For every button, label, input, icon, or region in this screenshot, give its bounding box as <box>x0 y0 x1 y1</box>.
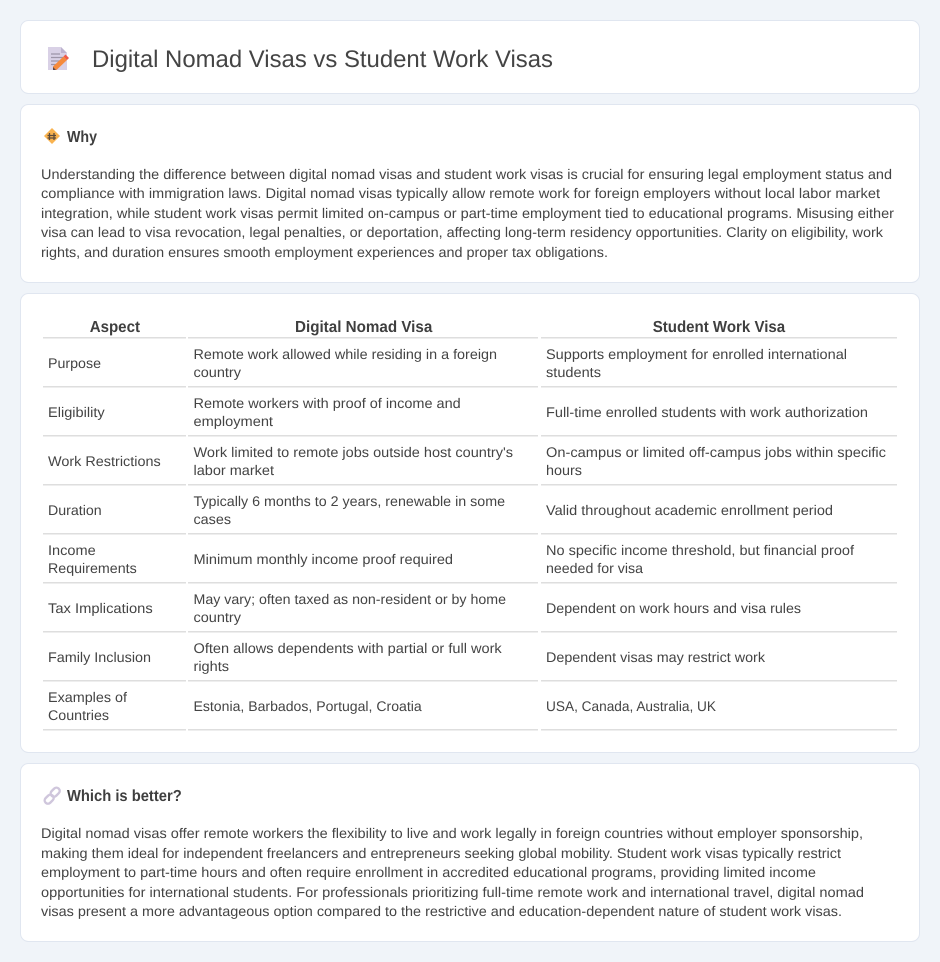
table row: tax implications: Tax Implications <box>48 600 153 616</box>
text block: which is better paragraph: employment to part-time hours and often require enrollment in accredited educational programs, providing limited income <box>41 864 816 880</box>
text block: why paragraph: Understanding the difference between digital nomad visas and student work visas is crucial for ensuring legal employment status and <box>41 166 892 182</box>
table row: duration: Duration <box>48 502 102 518</box>
table row: duration: Typically 6 months to 2 years, renewable in some <box>194 493 505 509</box>
icon: chain link <box>43 786 61 805</box>
table row: income requirements: Minimum monthly income proof required <box>194 551 453 567</box>
table row: tax implications <box>43 591 897 632</box>
table row: income requirements: needed for visa <box>546 560 643 576</box>
icon: document with pencil <box>48 47 69 70</box>
table row: family inclusion <box>43 640 897 682</box>
table row: eligibility: Eligibility <box>48 404 105 420</box>
table row: family inclusion: Family Inclusion <box>48 649 151 665</box>
table row: tax implications: Dependent on work hours and visa rules <box>546 600 801 616</box>
table header row: Aspect <box>90 319 141 336</box>
text block: why paragraph: rights, and duration ensures smooth employment experiences and proper tax obligations. <box>41 244 608 260</box>
table header row: Student Work Visa <box>653 319 785 336</box>
table row: purpose: country <box>194 364 241 380</box>
table row: examples of countries: Examples of <box>48 689 127 705</box>
text block: why paragraph: compliance with immigration laws. Digital nomad visas typically allow remote work for foreign employers without local labor market <box>41 185 880 201</box>
table row: eligibility: employment <box>194 413 273 429</box>
table row: work restrictions <box>43 444 897 486</box>
text block: which is better paragraph: making them ideal for independent freelancers and entrepreneurs seeking global mobility. Student work visas typically restrict <box>41 845 841 861</box>
panel: comparison table <box>20 294 920 752</box>
table row: duration: cases <box>194 511 231 527</box>
heading: which is better: Which is better? <box>67 788 182 805</box>
table row: income requirements: Income <box>48 542 96 558</box>
panel: which is better <box>20 764 920 942</box>
table row: duration: Valid throughout academic enrollment period <box>546 502 833 518</box>
table row: family inclusion: rights <box>194 658 229 674</box>
table row: eligibility: Remote workers with proof of income and <box>194 395 461 411</box>
icon: warning diamond <box>44 128 60 144</box>
table row: eligibility <box>43 395 897 436</box>
text block: why paragraph: visa can lead to visa revocation, legal penalties, or deportation, affecting long-term residency opportunities. Clarity on eligibility, work <box>41 224 884 240</box>
text block: which is better paragraph <box>41 825 864 919</box>
table row: work restrictions: Work Restrictions <box>48 453 161 469</box>
heading: why: Why <box>67 129 97 146</box>
table row: duration <box>43 493 897 534</box>
table row: work restrictions: Work limited to remote jobs outside host country's <box>194 444 513 460</box>
table row: purpose: students <box>546 364 601 380</box>
table row: tax implications: May vary; often taxed as non-resident or by home <box>194 591 506 607</box>
table row: income requirements <box>43 542 897 584</box>
table row: tax implications: country <box>194 609 241 625</box>
text block: which is better paragraph: opportunities for international students. For professionals prioritizing full-time remote work and international travel, digital nomad <box>41 884 864 900</box>
table row: examples of countries <box>43 689 897 730</box>
table row: purpose: Supports employment for enrolled international <box>546 346 847 362</box>
table row: examples of countries: Estonia, Barbados, Portugal, Croatia <box>194 698 422 714</box>
table row: family inclusion: Dependent visas may restrict work <box>546 649 766 665</box>
panel: title header <box>20 20 920 94</box>
panel: why <box>20 104 920 282</box>
table row: work restrictions: On-campus or limited off-campus jobs within specific <box>546 444 886 460</box>
text block: why paragraph <box>41 166 894 260</box>
text block: which is better paragraph: Digital nomad visas offer remote workers the flexibility to live and work legally in foreign countries without employer sponsorship, <box>41 825 863 841</box>
table row: family inclusion: Often allows dependents with partial or full work <box>194 640 503 656</box>
text block: which is better paragraph: visas present a more advantageous option compared to the restrictive and education-dependent nature of student work visas. <box>41 903 842 919</box>
table row: examples of countries: Countries <box>48 707 109 723</box>
table row: income requirements: No specific income threshold, but financial proof <box>546 542 854 558</box>
table row: purpose: Remote work allowed while residing in a foreign <box>194 346 497 362</box>
text block: why paragraph: integration, while student work visas permit limited on-campus or part-time employment tied to educational programs. Misusing either <box>41 205 894 221</box>
table header row: Digital Nomad Visa <box>295 319 432 336</box>
table row: eligibility: Full-time enrolled students with work authorization <box>546 404 868 420</box>
table row: work restrictions: labor market <box>194 462 274 478</box>
table row: income requirements: Requirements <box>48 560 137 576</box>
table row: work restrictions: hours <box>546 462 582 478</box>
table row: purpose: Purpose <box>48 355 101 371</box>
title: Digital Nomad Visas vs Student Work Visas <box>92 46 553 73</box>
table row: examples of countries: USA, Canada, Australia, UK <box>546 698 717 714</box>
table row: purpose <box>43 346 897 388</box>
table header row <box>43 319 897 338</box>
